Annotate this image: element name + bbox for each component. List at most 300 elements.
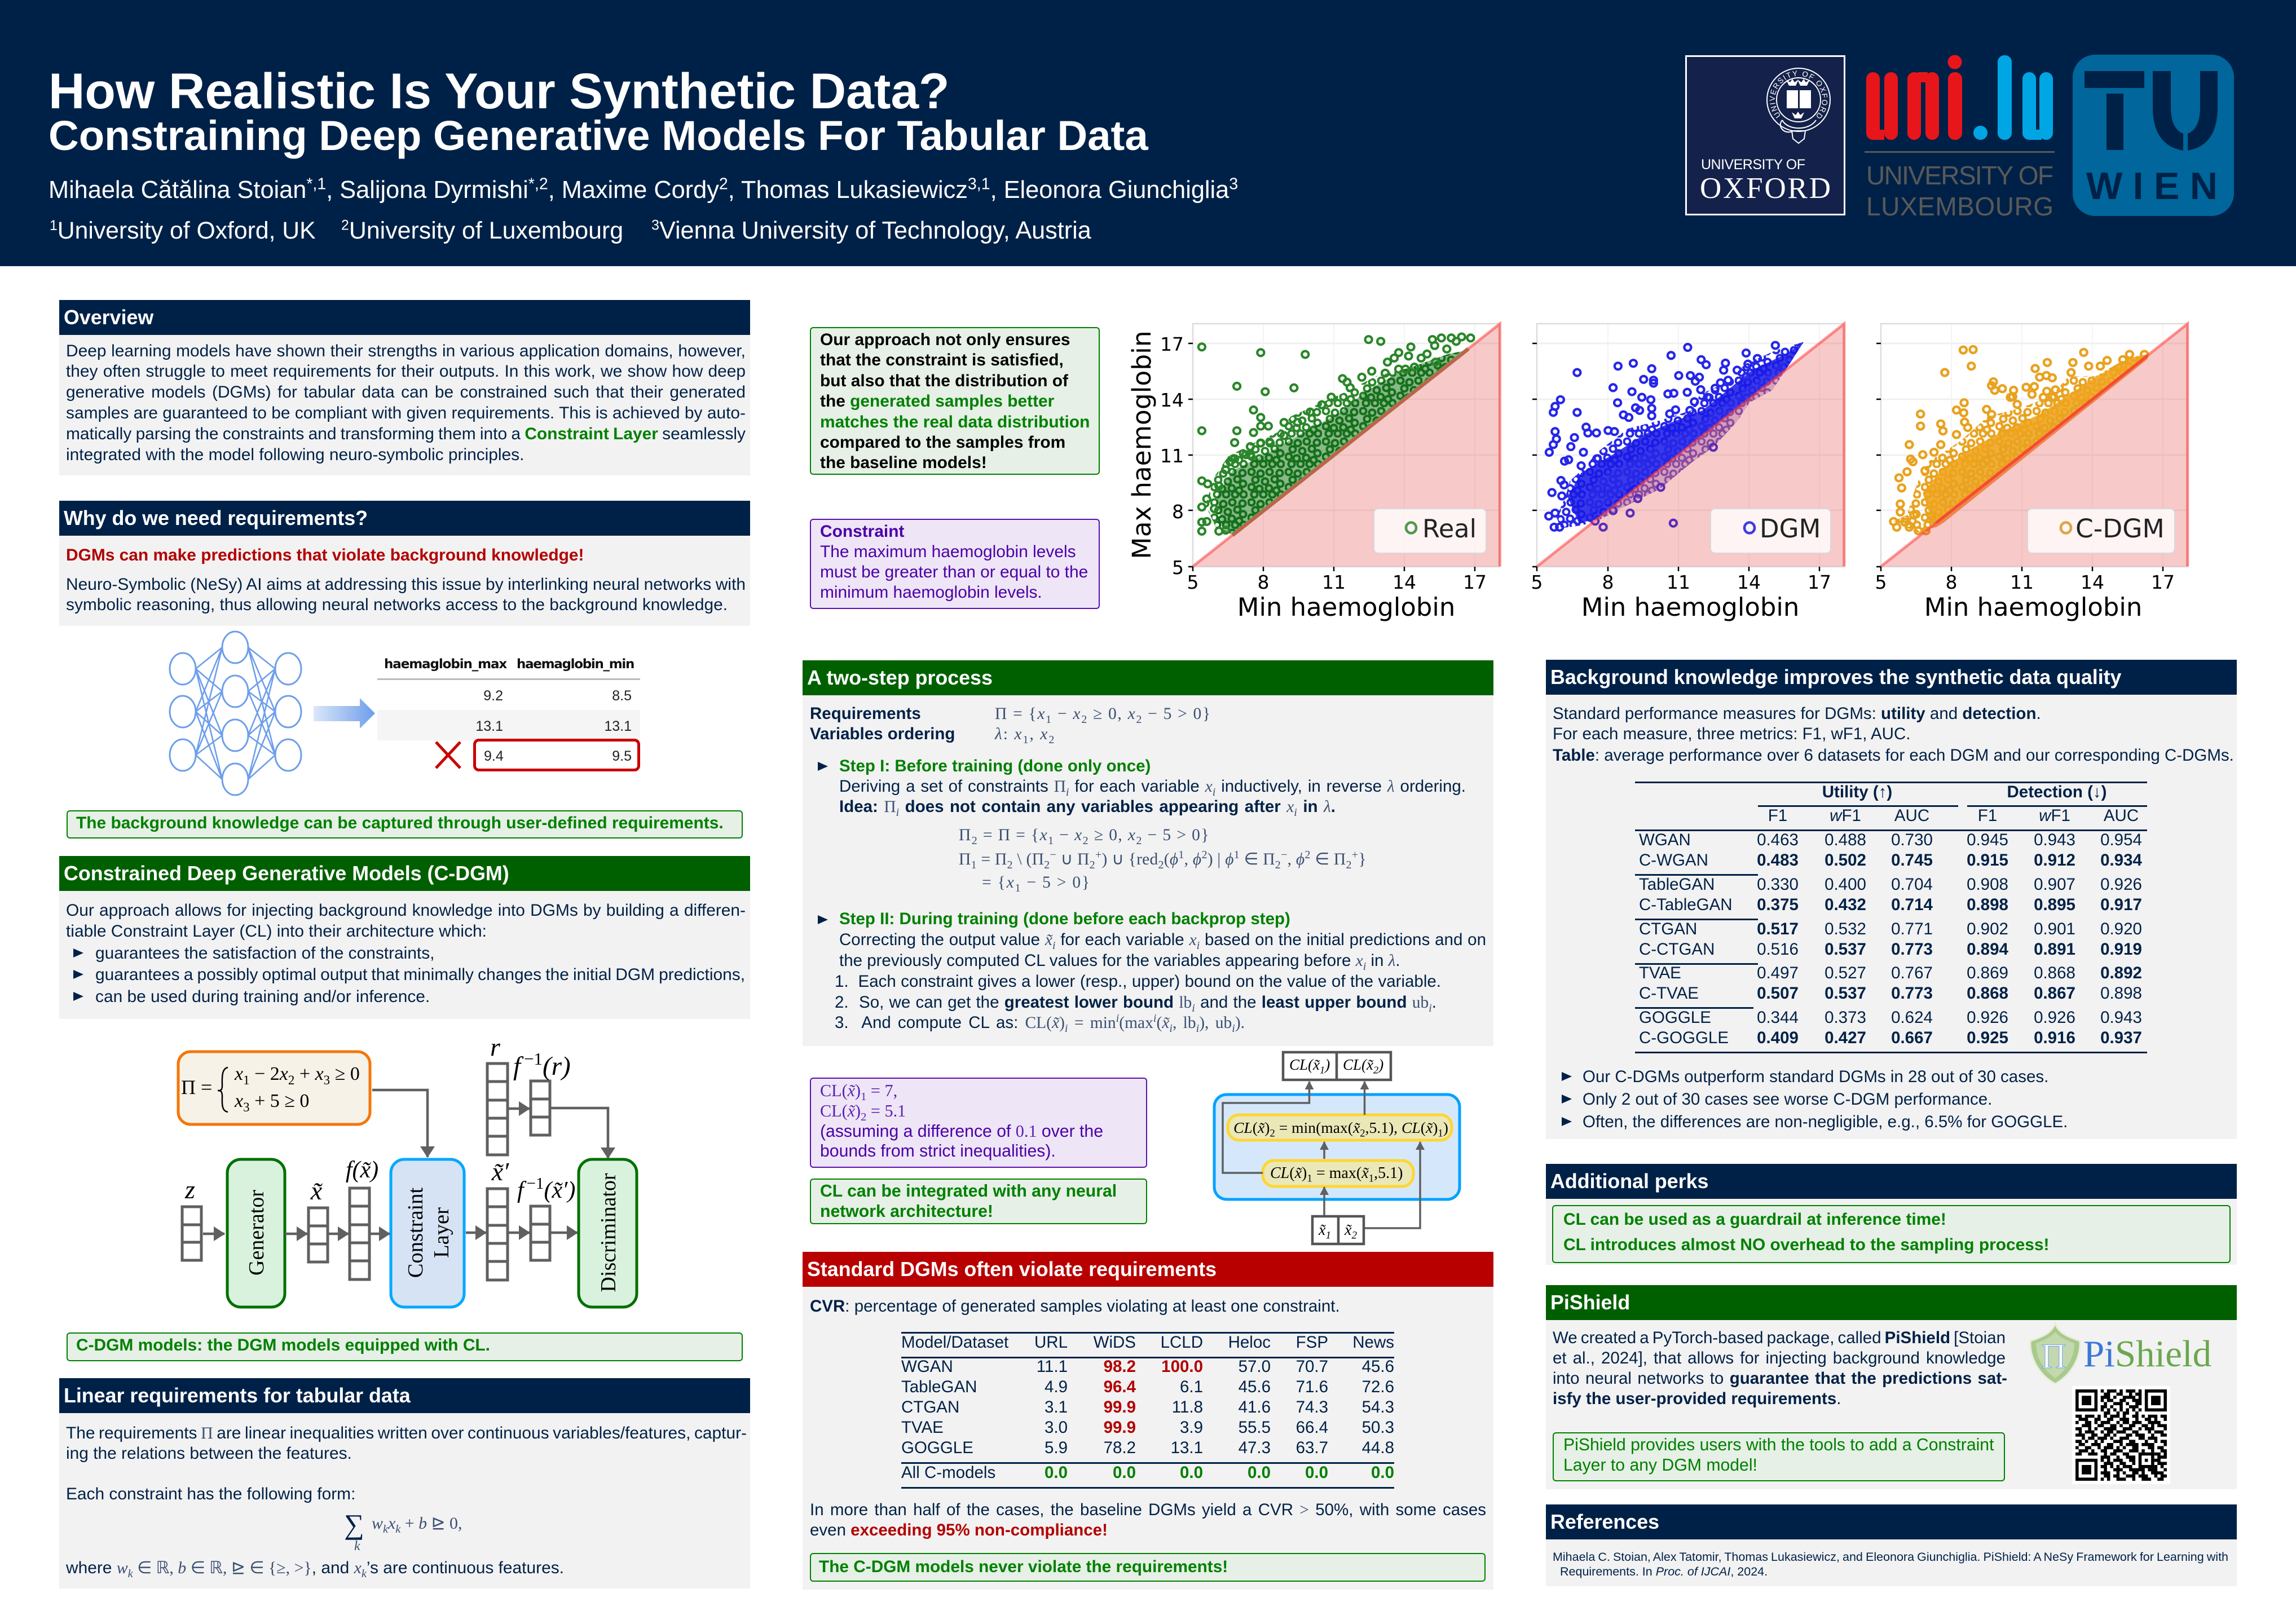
- generator block: Generator: [245, 1190, 268, 1276]
- diagram labels: f(x̃): [346, 1157, 378, 1183]
- reference line 1: Mihaela C. Stoian, Alex Tatomir, Thomas Lukasiewicz, and Eleonora Giunchiglia. PiShield: A NeSy Framework for Learning with: [1553, 1550, 2228, 1564]
- table: constraint violation rates: 74.3: [1296, 1398, 1328, 1416]
- diagram labels: −1: [527, 1175, 544, 1193]
- callout: CL integration: CL can be integrated with any neural: [820, 1182, 1117, 1201]
- logo: TU Wien: WIEN: [2086, 165, 2218, 208]
- bullet: worse: Only 2 out of 30 cases see worse C-DGM performance.: [1583, 1090, 1992, 1109]
- table: utility and detection: 0.937: [2100, 1029, 2142, 1047]
- figure: neural network with output table: [169, 630, 640, 796]
- legend: [2028, 509, 2175, 553]
- callout: CL values: CL(x̃)1 = 7,: [820, 1081, 897, 1103]
- overview text: generative models (DGMs) for tabular data can be constrained such that their generated: [66, 383, 746, 401]
- diagram labels: (x̃′): [544, 1177, 575, 1203]
- table: constraint violation rates: 0.0: [1045, 1463, 1068, 1482]
- table: utility and detection: 0.908: [1967, 875, 2008, 894]
- NeSy text line 2: symbolic reasoning, thus allowing neural networks access to the background knowledge.: [66, 595, 728, 614]
- step II text 2: the previously computed CL values for the variables appearing before xi in λ.: [839, 951, 1400, 973]
- step I idea: Idea: Πi does not contain any variables appearing after xi in λ.: [839, 797, 1336, 819]
- callout: CL integration: network architecture!: [820, 1202, 993, 1221]
- table: utility and detection: 0.714: [1891, 895, 1933, 914]
- PiShield text: isfy the user-provided requirements.: [1553, 1389, 1841, 1408]
- table: constraint violation rates: GOGGLE: [901, 1438, 973, 1457]
- callout: approach distribution: matches the real data distribution: [820, 413, 1090, 431]
- DGM data points: [1545, 342, 1804, 531]
- table: constraint violation rates: Model/Dataset: [901, 1333, 1008, 1352]
- table: constraint violation rates: 54.3: [1362, 1398, 1394, 1416]
- tick labels: 11: [1322, 571, 1346, 593]
- x axis label: Min haemoglobin: [1237, 592, 1455, 622]
- table: utility and detection: 0.907: [2034, 875, 2075, 894]
- table: utility and detection: 0.730: [1891, 831, 1933, 849]
- callout: CL values: [810, 1078, 1147, 1168]
- table: utility and detection: C-WGAN: [1639, 851, 1708, 870]
- measures text 3: Table: average performance over 6 datasets for each DGM and our corresponding C-DGMs.: [1553, 746, 2234, 765]
- table: constraint violation rates: 6.1: [1180, 1378, 1203, 1396]
- table: utility and detection: 0.895: [2034, 895, 2075, 914]
- table: constraint violation rates: 11.8: [1172, 1398, 1203, 1416]
- table: constraint violation rates: 0.0: [1248, 1463, 1271, 1482]
- table: utility and detection: 0.868: [1967, 984, 2008, 1003]
- table: utility and detection: 0.916: [2034, 1029, 2075, 1047]
- NeSy text line 1: Neuro-Symbolic (NeSy) AI aims at addressing this issue by interlinking neural networks with: [66, 575, 746, 594]
- table: utility and detection: 0.917: [2100, 895, 2142, 914]
- sample table: 9.5: [612, 748, 632, 764]
- heading: two-step process: [803, 660, 1493, 695]
- constraint formula: +: [294, 1063, 315, 1084]
- table: utility and detection: [1635, 782, 2147, 1052]
- heading: overview: [59, 300, 750, 335]
- table: utility and detection: 0.945: [1967, 831, 2008, 849]
- callout: perks: CL introduces almost NO overhead to the sampling process!: [1563, 1235, 2049, 1254]
- sample table: 8.5: [612, 688, 632, 704]
- heading: why: Why do we need requirements?: [64, 507, 368, 529]
- CVR definition: CVR: percentage of generated samples violating at least one constraint.: [810, 1297, 1340, 1316]
- requirements formula: Π = {x1 − x2 ≥ 0, x2 − 5 > 0}: [995, 705, 1211, 726]
- chart: C-DGM scatter: [0, 0, 2296, 632]
- tick labels: 14: [2081, 571, 2104, 593]
- table: utility and detection: 0.330: [1757, 875, 1799, 894]
- table: utility and detection: 0.667: [1891, 1029, 1933, 1047]
- table: constraint violation rates: [901, 1332, 1394, 1488]
- table: constraint violation rates: 63.7: [1296, 1438, 1328, 1457]
- callout: PiShield tools: Layer to any DGM model!: [1563, 1456, 1757, 1475]
- table: constraint violation rates: All C-models: [901, 1463, 995, 1482]
- table: utility and detection: 0.919: [2100, 940, 2142, 959]
- table: utility and detection: 0.373: [1825, 1008, 1866, 1027]
- table: utility and detection: 0.915: [1967, 851, 2008, 870]
- panel: PiShield: [1546, 1285, 2237, 1489]
- table: utility and detection: 0.532: [1825, 920, 1866, 938]
- table: utility and detection: 0.507: [1757, 984, 1799, 1003]
- overview text: they often struggle to meet requirements for their outputs. In this work, we show how deep: [66, 362, 746, 381]
- constraint formula: x: [279, 1063, 288, 1084]
- callout: approach distribution: [810, 327, 1100, 475]
- table: utility and detection: C-TVAE: [1639, 984, 1699, 1003]
- constraint formula: 3: [243, 1100, 250, 1114]
- bullet 1: guarantees the satisfaction of the constraints,: [95, 944, 434, 963]
- formula: pi 2: Π2 = Π = {x1 − x2 ≥ 0, x2 − 5 > 0}: [959, 826, 1210, 847]
- table: constraint violation rates: 50.3: [1362, 1418, 1394, 1437]
- bullet marker: step II: [818, 915, 828, 924]
- infeasible region: [1193, 324, 1500, 566]
- overview text: samples are guaranteed to be compliant with given requirements. This is achieved by auto-: [66, 404, 746, 422]
- table: utility and detection: 0.869: [1967, 964, 2008, 982]
- form sentence: Each constraint has the following form:: [66, 1485, 355, 1503]
- table: constraint violation rates: 66.4: [1296, 1418, 1328, 1437]
- table: constraint violation rates: 45.6: [1239, 1378, 1271, 1396]
- label: x1 input: x̃1: [1319, 1221, 1331, 1242]
- diagram: constraint layer computation: [1213, 1049, 1462, 1246]
- heading: background knowledge: [1546, 660, 2237, 695]
- table: utility and detection: 0.898: [2100, 984, 2142, 1003]
- constraint formula: ≥ 0: [330, 1063, 360, 1084]
- table: utility and detection: F1: [1768, 806, 1787, 825]
- constraint layer block: Layer: [430, 1207, 453, 1258]
- step I heading: Step I: Before training (done only once): [839, 757, 1151, 775]
- requirements text line 2: ing the relations between the features.: [66, 1444, 352, 1463]
- table: utility and detection: 0.891: [2034, 940, 2075, 959]
- table: constraint violation rates: 96.4: [1104, 1378, 1136, 1396]
- ordering label: Variables ordering: [810, 725, 955, 743]
- table: constraint violation rates: TableGAN: [901, 1378, 977, 1396]
- panel: standard DGMs violate requirements: [803, 1252, 1493, 1590]
- table: utility and detection: 0.934: [2100, 851, 2142, 870]
- tick labels: 17: [2151, 571, 2175, 593]
- table: utility and detection: 0.892: [2100, 964, 2142, 982]
- table: utility and detection: 0.483: [1757, 851, 1799, 870]
- tick labels: 5: [1531, 571, 1543, 593]
- table: utility and detection: C-GOGGLE: [1639, 1029, 1729, 1047]
- tick labels: [1160, 333, 1487, 593]
- tick labels: 8: [1602, 571, 1614, 593]
- constraint layer block: Constraint: [404, 1187, 428, 1278]
- callout: CL values: bounds from strict inequalities).: [820, 1142, 1056, 1160]
- table: utility and detection: 0.943: [2034, 831, 2075, 849]
- tick labels: [1875, 571, 2175, 593]
- bullet 3: can be used during training and/or inference.: [95, 987, 430, 1006]
- table: constraint violation rates: 44.8: [1362, 1438, 1394, 1457]
- heading: background knowledge: Background knowledge improves the synthetic data quality: [1550, 666, 2121, 689]
- table: utility and detection: 0.488: [1825, 831, 1866, 849]
- sample table: haemaglobin_min: [517, 657, 634, 672]
- overview text: [66, 342, 746, 464]
- table: utility and detection: 0.926: [2034, 1008, 2075, 1027]
- tick labels: 5: [1172, 557, 1184, 579]
- item 3: 3. And compute CL as: CL(x̃)i = mini(maxi(x̃i, lbi), ubi).: [835, 1012, 1245, 1035]
- panel: constrained deep generative models: [59, 856, 750, 1019]
- chart: DGM scatter: [1531, 321, 1845, 622]
- table: utility and detection: 0.463: [1757, 831, 1799, 849]
- callout: approach distribution: that the constraint is satisfied,: [820, 351, 1064, 369]
- table: utility and detection: 0.537: [1825, 984, 1866, 1003]
- table: constraint violation rates: FSP: [1296, 1333, 1328, 1352]
- callout: constraint definition: Constraint: [820, 522, 904, 541]
- logo: University of Luxembourg: UNIVERSITY OF: [1866, 161, 2053, 190]
- measures text 1: Standard performance measures for DGMs: utility and detection.: [1553, 704, 2041, 723]
- table: constraint violation rates: WiDS: [1094, 1333, 1136, 1352]
- callout: approach distribution: compared to the samples from: [820, 433, 1065, 452]
- affiliation: Oxford: 1University of Oxford, UK: [50, 217, 316, 244]
- sample table: haemaglobin_max: [384, 657, 506, 672]
- table: constraint violation rates: 100.0: [1161, 1357, 1203, 1376]
- tick labels: 14: [1737, 571, 1761, 593]
- table: constraint violation rates: 3.1: [1045, 1398, 1068, 1416]
- table: utility and detection: 0.537: [1825, 940, 1866, 959]
- label: CL x2 output: CL(x̃2): [1343, 1056, 1383, 1075]
- heading: C-DGM: Constrained Deep Generative Models (C-DGM): [64, 862, 509, 885]
- heading: linear requirements: Linear requirements for tabular data: [64, 1384, 411, 1407]
- step II heading: Step II: During training (done before each backprop step): [839, 910, 1290, 928]
- diagram labels: −1: [524, 1049, 543, 1069]
- table: utility and detection: 0.409: [1757, 1029, 1799, 1047]
- logo: University of Luxembourg: LUXEMBOURG: [1866, 192, 2053, 221]
- formula: linear constraint: [344, 1508, 462, 1554]
- tick labels: 8: [1258, 571, 1269, 593]
- icon: neural network: [169, 630, 302, 796]
- C-DGM data points: [1890, 346, 2148, 534]
- table: utility and detection: 0.771: [1891, 920, 1933, 938]
- table: utility and detection: 0.516: [1757, 940, 1799, 959]
- heading: PiShield: [1546, 1285, 2237, 1320]
- where sentence: where wk ∈ ℝ, b ∈ ℝ, ⊵ ∈ {≥, >}, and xk’s are continuous features.: [66, 1559, 564, 1580]
- callout: approach distribution: Our approach not only ensures: [820, 330, 1070, 349]
- item 2: 2. So, we can get the greatest lower bound lbi and the least upper bound ubi.: [835, 993, 1436, 1014]
- table: utility and detection: 0.894: [1967, 940, 2008, 959]
- callout: background knowledge: [67, 810, 743, 839]
- constraint formula: x: [234, 1063, 243, 1084]
- axis ticks: [1532, 343, 1819, 571]
- infeasible region: [1537, 324, 1844, 566]
- table: constraint violation rates: URL: [1034, 1333, 1068, 1352]
- callout: CL values: (assuming a difference of 0.1 over the: [820, 1122, 1103, 1141]
- table: constraint violation rates: 99.9: [1104, 1398, 1136, 1416]
- constraint formula: x: [315, 1063, 324, 1084]
- diagram labels: z: [184, 1175, 195, 1204]
- arrows: [203, 1090, 608, 1234]
- title: How Realistic Is Your Synthetic Data?: [49, 63, 950, 119]
- axis ticks: [1876, 343, 2163, 571]
- panel: overview: [59, 300, 750, 475]
- table: utility and detection: 0.926: [1967, 1008, 2008, 1027]
- table: utility and detection: 0.517: [1757, 920, 1799, 938]
- table: utility and detection: 0.912: [2034, 851, 2075, 870]
- table: utility and detection: GOGGLE: [1639, 1008, 1711, 1027]
- x axis label: Min haemoglobin: [1924, 592, 2142, 622]
- table: utility and detection: 0.344: [1757, 1008, 1799, 1027]
- bullet: outperform: Our C-DGMs outperform standard DGMs in 28 out of 30 cases.: [1583, 1067, 2048, 1086]
- table: utility and detection: 0.375: [1757, 895, 1799, 914]
- heading: overview: Overview: [64, 306, 153, 329]
- callout: constraint definition: The maximum haemoglobin levels: [820, 542, 1076, 561]
- table: utility and detection: CTGAN: [1639, 920, 1697, 938]
- requirements text line 1: The requirements Π are linear inequalities written over continuous variables/features, captur-: [66, 1424, 747, 1442]
- heading: PiShield: PiShield: [1550, 1291, 1630, 1314]
- callout: PiShield tools: PiShield provides users with the tools to add a Constraint: [1563, 1436, 1994, 1454]
- subtitle: Constraining Deep Generative Models For Tabular Data: [49, 112, 1148, 159]
- heading: references: References: [1550, 1511, 1659, 1533]
- logo: PiShield: Π: [2041, 1338, 2066, 1376]
- constraint formula: x: [234, 1091, 243, 1111]
- sample table: 9.2: [483, 688, 503, 704]
- legend: [1711, 509, 1831, 553]
- table: utility and detection: 0.901: [2034, 920, 2075, 938]
- diagram labels: [184, 1032, 575, 1205]
- bullet: differences: Often, the differences are non-negligible, e.g., 6.5% for GOGGLE.: [1583, 1113, 2068, 1131]
- panel: linear requirements: [59, 1378, 750, 1588]
- table: utility and detection: 0.868: [2034, 964, 2075, 982]
- table: constraint violation rates: 41.6: [1239, 1398, 1271, 1416]
- measures text 2: For each measure, three metrics: F1, wF1, AUC.: [1553, 725, 1910, 743]
- heading: C-DGM: [59, 856, 750, 891]
- heading: two-step process: A two-step process: [807, 667, 993, 689]
- constraint formula: 2: [288, 1073, 294, 1087]
- table: utility and detection: 0.773: [1891, 940, 1933, 959]
- QR code: [2072, 1386, 2170, 1484]
- table: utility and detection: 0.773: [1891, 984, 1933, 1003]
- table: constraint violation rates: LCLD: [1161, 1333, 1203, 1352]
- legend: C-DGM: [2075, 514, 2165, 544]
- logo: University of Oxford: [1685, 55, 1845, 215]
- panel: background knowledge improves quality: [1546, 660, 2237, 1139]
- table: constraint violation rates: 47.3: [1239, 1438, 1271, 1457]
- table: constraint violation rates: 13.1: [1171, 1438, 1203, 1457]
- formula: linear constraint: k: [354, 1539, 360, 1554]
- table: constraint violation rates: 0.0: [1305, 1463, 1328, 1482]
- callout: constraint definition: [810, 519, 1100, 609]
- table: constraint violation rates: 3.0: [1045, 1418, 1068, 1437]
- formula: pi 1: Π1 = Π2 \ (Π2− ∪ Π2+) ∪ {red2(ϕ1, ϕ2) | ϕ1 ∈ Π2−, ϕ2 ∈ Π2+}: [959, 849, 1367, 871]
- constraint formula: 1: [243, 1073, 250, 1087]
- table: constraint violation rates: 98.2: [1104, 1357, 1136, 1376]
- tick labels: 8: [1172, 501, 1184, 523]
- tick labels: 5: [1875, 571, 1887, 593]
- table: utility and detection: 0.943: [2100, 1008, 2142, 1027]
- formula: linear constraint: ∑: [344, 1508, 364, 1540]
- table: utility and detection: 0.867: [2034, 984, 2075, 1003]
- tick labels: 17: [1160, 333, 1184, 355]
- table: utility and detection: 0.497: [1757, 964, 1799, 982]
- table: utility and detection: Utility (↑): [1822, 783, 1892, 801]
- generator block: [227, 1159, 285, 1307]
- table: utility and detection: 0.898: [1967, 895, 2008, 914]
- infeasible region: [1881, 324, 2188, 566]
- table: utility and detection: 0.502: [1825, 851, 1866, 870]
- table: utility and detection: wF1: [1830, 806, 1861, 825]
- table: constraint violation rates: 72.6: [1362, 1378, 1394, 1396]
- table: constraint violation rates: 3.9: [1180, 1418, 1203, 1437]
- constraints box: [178, 1052, 370, 1124]
- table: utility and detection: F1: [1978, 806, 1997, 825]
- table: utility and detection: C-CTGAN: [1639, 940, 1715, 959]
- table: constraint violation rates: 71.6: [1296, 1378, 1328, 1396]
- callout: perks: [1552, 1205, 2231, 1263]
- table: constraint violation rates: TVAE: [901, 1418, 944, 1437]
- arrow: network to table: [314, 698, 375, 729]
- table: constraint violation rates: CTGAN: [901, 1398, 959, 1416]
- legend: Real: [1422, 515, 1477, 544]
- table: constraint violation rates: 57.0: [1239, 1357, 1271, 1376]
- callout: never violate: The C-DGM models never violate the requirements!: [819, 1557, 1228, 1576]
- tick labels: 17: [1463, 571, 1487, 593]
- table: utility and detection: 0.745: [1891, 851, 1933, 870]
- table: constraint violation rates: 0.0: [1371, 1463, 1394, 1482]
- callout: CL integration: [810, 1179, 1147, 1224]
- table: constraint violation rates: 70.7: [1296, 1357, 1328, 1376]
- constraint formula: 3: [324, 1073, 330, 1087]
- label: x2 input: x̃2: [1345, 1221, 1357, 1242]
- requirements label: Requirements: [810, 704, 921, 723]
- constraint formula: + 5 ≥ 0: [250, 1091, 309, 1111]
- tick labels: [1531, 571, 1831, 593]
- constraint formula: Π =: [181, 1076, 212, 1098]
- table: utility and detection: 0.400: [1825, 875, 1866, 894]
- bullet marker: step I: [818, 762, 828, 771]
- table: utility and detection: 0.767: [1891, 964, 1933, 982]
- panel: references: [1546, 1504, 2237, 1586]
- reference line 2: Requirements. In Proc. of IJCAI, 2024.: [1560, 1565, 1768, 1578]
- diagram labels: (r): [543, 1052, 571, 1081]
- PiShield text: [1553, 1328, 2007, 1409]
- formula: linear constraint: wkxk + b ⊵ 0,: [372, 1514, 462, 1535]
- sample table: [377, 657, 640, 771]
- constraint layer block: [391, 1159, 464, 1307]
- table: utility and detection: 0.954: [2100, 831, 2142, 849]
- step II text 1: Correcting the output value x̃i for each variable xi based on the initial predictions and on: [839, 930, 1486, 952]
- heading: additional perks: Additional perks: [1550, 1170, 1708, 1193]
- table: utility and detection: 0.902: [1967, 920, 2008, 938]
- item 1: 1. Each constraint gives a lower (resp., upper) bound on the value of the variable.: [835, 972, 1441, 991]
- callout: constraint definition: minimum haemoglobin levels.: [820, 583, 1042, 602]
- table: utility and detection: Detection (↓): [2007, 783, 2107, 801]
- table: utility and detection: 0.427: [1825, 1029, 1866, 1047]
- bullet 2: guarantees a possibly optimal output that minimally changes the initial DGM predictions,: [95, 965, 745, 984]
- legend: [1374, 509, 1486, 553]
- table: utility and detection: 0.624: [1891, 1008, 1933, 1027]
- CVR conclusion line 1: In more than half of the cases, the baseline DGMs yield a CVR > 50%, with some cases: [810, 1501, 1486, 1519]
- tick labels: 11: [2010, 571, 2034, 593]
- table: utility and detection: TableGAN: [1639, 875, 1715, 894]
- logo: University of Oxford: UNIVERSITY OF OXFORD: [1770, 70, 1827, 118]
- overview text: matically parsing the constraints and transforming them into a Constraint Layer seamlessly: [66, 425, 746, 443]
- icon: red cross: [435, 741, 461, 769]
- formula: CL1: CL(x̃)1 = max(x̃1,5.1): [1270, 1164, 1403, 1185]
- heading: standard DGMs: [803, 1252, 1493, 1287]
- sample table: 9.4: [484, 748, 504, 764]
- y axis label: Max haemoglobin: [1127, 330, 1157, 559]
- table: constraint violation rates: 5.9: [1045, 1438, 1068, 1457]
- table: constraint violation rates: 0.0: [1180, 1463, 1203, 1482]
- PiShield text: We created a PyTorch-based package, called PiShield [Stoian: [1553, 1329, 2006, 1347]
- diagram labels: x̃: [310, 1176, 323, 1205]
- label: CL x1 output: CL(x̃1): [1289, 1056, 1330, 1075]
- bullet: worse: [1562, 1089, 2126, 1110]
- authors: Mihaela Cătălina Stoian*,1, Salijona Dyrmishi*,2, Maxime Cordy2, Thomas Lukasiewicz3,1, Eleonora Giunchiglia3: [49, 175, 1238, 204]
- callout: CL values: CL(x̃)2 = 5.1: [820, 1101, 906, 1123]
- discriminator block: [579, 1159, 637, 1307]
- table: utility and detection: TVAE: [1639, 964, 1681, 982]
- callout: approach distribution: but also that the distribution of: [820, 372, 1068, 390]
- tick labels: 14: [1392, 571, 1416, 593]
- x axis label: Min haemoglobin: [1581, 592, 1799, 622]
- callout: C-DGM models: [67, 1332, 743, 1361]
- formula: result: = {x1 − 5 > 0}: [982, 873, 1091, 894]
- tick labels: 11: [1160, 445, 1184, 467]
- logo: PiShield: PiShield: [2083, 1333, 2211, 1375]
- affiliation: Luxembourg: 2University of Luxembourg: [341, 217, 623, 244]
- formula: CL2: CL(x̃)2 = min(max(x̃2,5.1), CL(x̃)1): [1233, 1119, 1448, 1140]
- table: constraint violation rates: 4.9: [1045, 1378, 1068, 1396]
- table: utility and detection: 0.432: [1825, 895, 1866, 914]
